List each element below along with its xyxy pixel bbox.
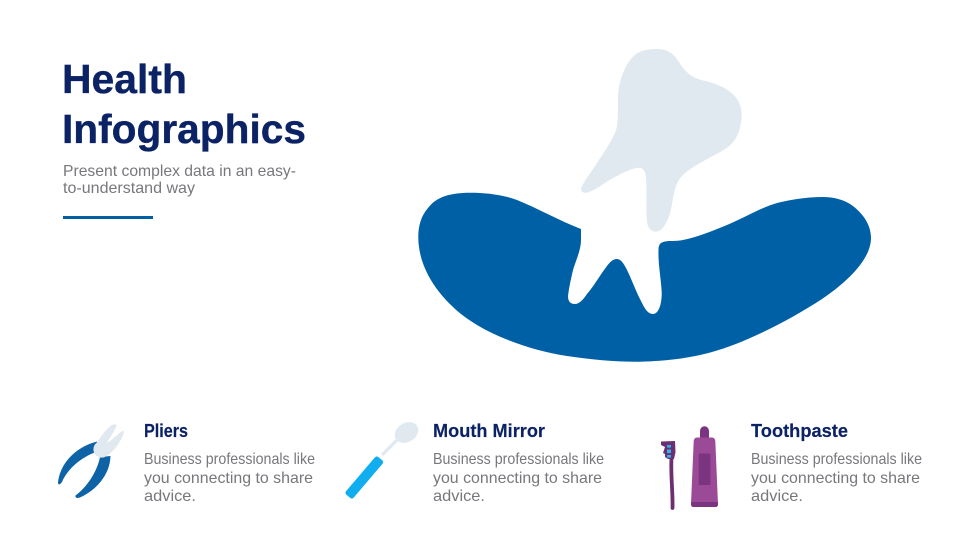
item: mouth mirror <box>348 418 604 505</box>
text: mouth mirror description <box>433 451 604 505</box>
text: pliers description <box>144 451 315 505</box>
icon: toothpaste tube <box>691 426 718 507</box>
text: mouth mirror description: advice. <box>433 488 485 505</box>
heading: pliers: Pliers <box>144 421 188 441</box>
text: pliers description: advice. <box>144 488 196 505</box>
heading: mouth mirror: Mouth Mirror <box>433 421 545 441</box>
icon: mouth mirror <box>348 418 422 496</box>
icon: toothbrush <box>661 441 676 508</box>
illustration: tooth and gum <box>418 49 871 362</box>
subtitle: to-understand way <box>63 180 195 197</box>
text: toothpaste description: Business professionals like <box>751 451 922 468</box>
heading: toothpaste: Toothpaste <box>751 421 848 441</box>
icon: pliers <box>58 424 124 498</box>
text: pliers description: you connecting to share <box>144 470 313 487</box>
subtitle <box>63 163 296 197</box>
text: toothpaste description <box>751 451 922 505</box>
gum with tooth socket <box>418 193 871 362</box>
subtitle: Present complex data in an easy- <box>63 163 296 180</box>
text: mouth mirror description: you connecting to share <box>433 470 602 487</box>
item: pliers <box>58 421 315 505</box>
text: pliers description: Business professionals like <box>144 451 315 468</box>
item: toothpaste <box>661 421 922 508</box>
text: toothpaste description: advice. <box>751 488 803 505</box>
loose tooth <box>581 49 742 232</box>
text: mouth mirror description: Business professionals like <box>433 451 604 468</box>
title: Infographics <box>62 106 306 152</box>
accent line <box>63 216 153 219</box>
text: toothpaste description: you connecting to share <box>751 470 920 487</box>
title <box>62 56 306 152</box>
title: Health <box>62 56 187 102</box>
